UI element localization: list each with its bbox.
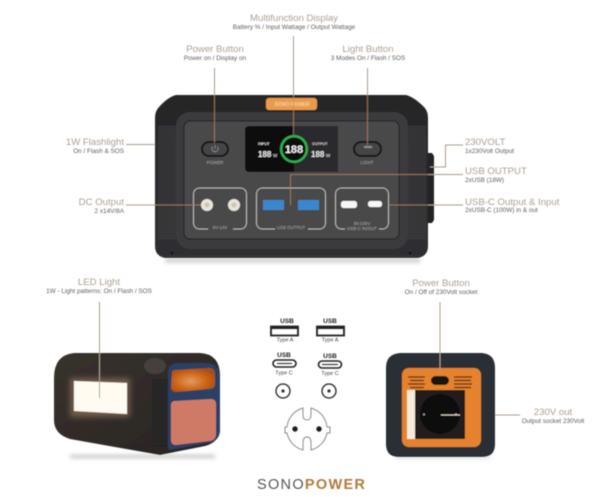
- USB type A left: [271, 318, 298, 344]
- DC socket left: [276, 384, 290, 398]
- callout: 230V out: [441, 407, 584, 425]
- callout: power button: [184, 44, 247, 143]
- body shell: [155, 95, 428, 258]
- white strip: [407, 390, 415, 439]
- USB type A right: USB: [323, 318, 337, 325]
- USB-C ports: 90-100V: [354, 221, 370, 226]
- brand tag: [266, 98, 317, 110]
- callout: 230V out: 230V out: [534, 407, 573, 418]
- brand tag: SONO POWER: [274, 102, 310, 108]
- callout: 1W flashlight: On / Flash & SOS: [73, 148, 124, 155]
- USB type C right: [318, 353, 342, 377]
- LED device: side view with light on: [54, 353, 220, 458]
- socket: [420, 394, 460, 434]
- callout: multifunction display: Multifunction Display: [250, 13, 338, 24]
- USB-C ports: [336, 188, 388, 231]
- USB type C left: USB: [277, 352, 291, 359]
- callout: 230 volt: [430, 137, 514, 167]
- callout: 1W flashlight: 1W Flashlight: [66, 137, 124, 148]
- pink panel: [171, 399, 216, 445]
- USB type C right: Type C: [321, 371, 339, 377]
- callout: light button: 3 Modes On / Flash / SOS: [331, 55, 405, 62]
- port icons group: [271, 318, 344, 450]
- display: W: [326, 153, 331, 158]
- USB-A ports: USB OUTPUT: [277, 225, 305, 230]
- display: 188: [285, 144, 303, 156]
- callout: 1W flashlight: [66, 137, 155, 155]
- light button: [354, 142, 381, 165]
- LED panel: [74, 381, 127, 414]
- corner highlight: [144, 358, 166, 374]
- body: [54, 353, 220, 455]
- callout: LED light: LED Light: [78, 277, 120, 288]
- light glow: [70, 378, 130, 417]
- DC output ports: 9V-14V: [213, 225, 227, 230]
- mounting screws: [171, 252, 411, 254]
- USB type A left: USB: [280, 318, 294, 325]
- orange window: [171, 368, 215, 392]
- callout: USB output: [290, 166, 527, 205]
- shadow: [395, 456, 490, 458]
- end cap: [168, 363, 220, 450]
- callout: USB-C output and input: [388, 197, 560, 214]
- callout: 230 volt: 1x230Volt Output: [465, 148, 514, 155]
- callout: USB output: 2xUSB (18W): [465, 177, 504, 184]
- callout: back power button: [405, 278, 478, 372]
- rocker switch: [431, 376, 449, 385]
- USB type C right: USB: [323, 353, 337, 360]
- DC output ports: [194, 188, 246, 231]
- body: [386, 353, 495, 457]
- callout: LED light: 1W - Light patterns: On / Flash / SOS: [46, 288, 152, 295]
- USB type C left: Type C: [275, 370, 293, 376]
- brand logo: SONOPOWER: [257, 477, 366, 493]
- orange faceplate: [402, 368, 481, 447]
- callout: USB output: USB OUTPUT: [465, 166, 527, 177]
- USB type A right: Type A: [322, 338, 339, 344]
- callout: USB-C output and input: USB-C Output & Input: [465, 197, 560, 208]
- callout: LED light: [46, 277, 152, 398]
- side plug housing: [425, 153, 434, 223]
- callout: back power button: Power Button: [412, 278, 470, 289]
- display: W: [273, 153, 278, 158]
- callout: 230V out: Output socket 230Volt: [522, 418, 584, 425]
- DC socket right: [322, 384, 336, 398]
- callout: power button: Power on / Display on: [184, 55, 247, 62]
- 230V plug icon: [285, 408, 330, 450]
- callout: DC output: DC Output: [79, 197, 124, 208]
- control panel: [184, 121, 399, 239]
- side ribbing: [158, 125, 176, 240]
- callout: 230 volt: 230VOLT: [465, 137, 505, 148]
- callout: power button: Power Button: [186, 44, 244, 55]
- callout: multifunction display: [233, 13, 356, 135]
- USB-A ports: [256, 188, 326, 231]
- display: 188: [311, 150, 325, 159]
- back device: socket view: [386, 353, 495, 458]
- power button: [202, 142, 228, 165]
- callout: back power button: On / Off of 230Volt socket: [405, 289, 478, 296]
- callout: DC output: [79, 197, 201, 215]
- callout: DC output: 2 x14V/8A: [94, 208, 125, 215]
- display: 188: [258, 150, 272, 159]
- callout: USB-C output and input: 2xUSB-C (100W) in & out: [465, 207, 538, 214]
- grille: [152, 378, 168, 446]
- USB type A left: Type A: [277, 338, 294, 344]
- light button: LIGHT: [361, 160, 374, 165]
- USB type A right: [317, 318, 344, 344]
- main device: power station front: [155, 95, 434, 262]
- socket housing: [415, 390, 465, 439]
- USB type C left: [273, 352, 296, 376]
- display: OUTPUT: [312, 142, 328, 146]
- inner frame: [176, 112, 408, 249]
- shadow: [70, 455, 215, 458]
- shadow under device: [165, 259, 420, 262]
- callout: multifunction display: Battery % / Input Wattage / Output Wattage: [233, 24, 356, 31]
- power button: POWER: [207, 160, 223, 165]
- display: [245, 126, 338, 172]
- callout: light button: Light Button: [342, 44, 394, 55]
- USB-C ports: USB-C IN/OUT: [347, 226, 377, 231]
- vents: [408, 377, 472, 388]
- callout: light button: [331, 44, 405, 145]
- display: INPUT: [258, 142, 270, 146]
